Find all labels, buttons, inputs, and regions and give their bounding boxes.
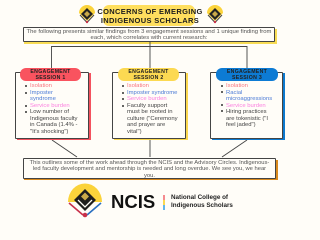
intro text box: each, which correlates with current research: (91, 34, 207, 40)
session 2 heading: SESSION 2 (133, 74, 164, 80)
organisation name: Indigenous Scholars (171, 202, 233, 209)
organisation name (171, 194, 233, 209)
session 1 list: Low number of (30, 109, 69, 115)
session 1 list: Imposter (30, 90, 53, 96)
title: INDIGENOUS SCHOLARS (101, 16, 199, 25)
session 1 heading: ENGAGEMENT (30, 68, 71, 74)
session 2 heading: ENGAGEMENT (128, 68, 169, 74)
session 1 list (30, 83, 78, 134)
closing text box: This outlines some of the work ahead through the NCIS and the Advisory Circles. Indigenous- (30, 160, 269, 166)
session 3 list: feel jaded") (226, 122, 256, 128)
title (97, 5, 203, 26)
session 1 list: Service burden (30, 102, 70, 108)
logo divider (163, 195, 165, 210)
session 3 list: microaggressions (226, 96, 272, 102)
session 2 list: must be rooted in (127, 109, 173, 115)
panel: session 2 (112, 68, 188, 140)
session 3 list (226, 83, 272, 128)
session 3 heading: ENGAGEMENT (227, 68, 267, 74)
session 2 list: Imposter syndrome (127, 90, 177, 96)
closing text box (23, 158, 276, 179)
session 3 list: are tokenistic ("I (226, 116, 268, 122)
session 2 heading (118, 68, 179, 81)
session 2 list (127, 83, 178, 134)
session 1 list: Indigenous faculty (30, 116, 78, 122)
session 1 list: "It's shocking") (30, 128, 68, 134)
closing text box: you. (144, 172, 155, 178)
session 1 list: in Canada (1.4% - (30, 122, 77, 128)
session 3 list: Isolation (226, 83, 248, 89)
session 1 list: syndrome (30, 96, 56, 102)
NCIS wordmark: NCIS (111, 191, 155, 212)
session 2 list: Isolation (127, 83, 149, 89)
session 3 list: Racial (226, 90, 242, 96)
panel: session 1 (15, 68, 91, 140)
organisation name: National College of (171, 194, 228, 201)
session 2 list: vital") (127, 128, 142, 134)
session 3 heading: SESSION 3 (232, 74, 262, 80)
closing shadow (24, 160, 278, 180)
session 1 heading: SESSION 1 (35, 74, 66, 80)
intro shadow (24, 29, 277, 44)
session 2 list: culture ("Ceremony (127, 116, 178, 122)
session 1 heading (20, 68, 81, 81)
title: CONCERNS OF EMERGING (97, 7, 203, 16)
session 2 list: Service burden (127, 96, 167, 102)
session 2 list: Faculty support (127, 102, 167, 108)
session 3 list: Service burden (226, 102, 266, 108)
session 3 heading (216, 68, 278, 81)
panel: session 3 (210, 68, 285, 140)
closing text box: led faculty development and mentorship is needed and long overdue. We see you, we hear (33, 166, 266, 172)
intro text box (23, 27, 275, 42)
icon: right emblem (207, 5, 223, 24)
icon: NCIS logo (68, 184, 102, 218)
icon: left emblem (79, 5, 95, 24)
session 1 list: Isolation (30, 83, 52, 89)
session 3 list: Hiring practices (226, 109, 267, 115)
session 2 list: and prayer are (127, 122, 165, 128)
intro text box: The following presents similar findings from 3 engagement sessions and 1 unique finding from (27, 28, 271, 34)
